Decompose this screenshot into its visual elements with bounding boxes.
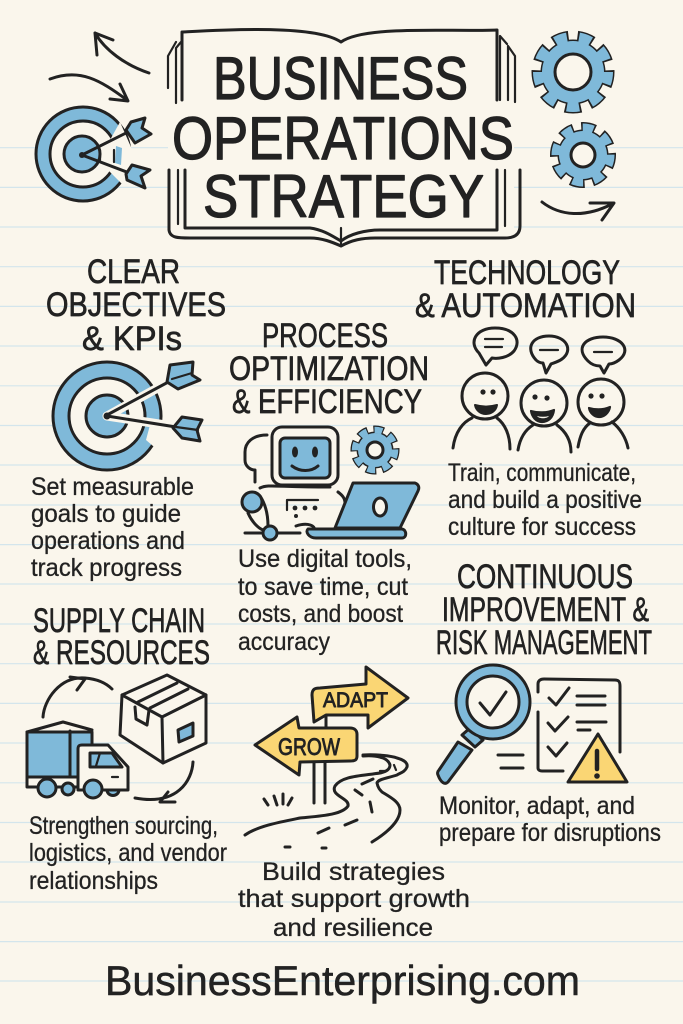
text: continuous improvement: prepare for disruptions: [439, 819, 661, 847]
text: supply chain: Strengthen sourcing,: [29, 812, 218, 840]
text: clear objectives: track progress: [31, 554, 182, 582]
icon: cardboard box: [120, 675, 206, 763]
text: strategy: that support growth: [238, 885, 470, 913]
icon: truck: [27, 722, 128, 798]
section: supply chain: [27, 602, 227, 895]
text: supply chain: [29, 812, 227, 895]
icon: large gear: [538, 37, 608, 107]
title: OPERATIONS: [172, 105, 514, 172]
section: technology and automation: [415, 254, 642, 541]
text: strategy: Build strategies: [262, 858, 445, 886]
text: process optimization: accuracy: [238, 628, 330, 656]
icon: curved arrow right: [542, 202, 614, 220]
heading: clear objectives: [46, 253, 226, 358]
text: supply chain: relationships: [29, 867, 158, 895]
text: technology: Train, communicate,: [448, 459, 636, 487]
heading: clear objectives: CLEAR: [87, 253, 180, 291]
heading: clear objectives: & KPIs: [82, 320, 182, 358]
section: strategy signpost: [238, 667, 470, 942]
heading: supply chain: SUPPLY CHAIN: [33, 602, 205, 640]
icon: checklist: [498, 679, 620, 771]
title: STRATEGY: [203, 163, 484, 230]
text: clear objectives: [31, 473, 194, 582]
text: process optimization: Use digital tools,: [238, 545, 412, 573]
text: clear objectives: goals to guide: [31, 500, 181, 528]
heading: technology: TECHNOLOGY: [434, 254, 620, 292]
section: process optimization: [229, 317, 429, 656]
section: clear objectives: [31, 253, 226, 582]
heading: continuous improvement: [436, 558, 652, 662]
footer website: BusinessEnterprising.com: [105, 957, 580, 1004]
icon: signpost and road: ADAPT: [323, 689, 388, 712]
heading: supply chain: [33, 602, 210, 672]
text: clear objectives: operations and: [31, 527, 185, 555]
heading: process optimization: PROCESS: [262, 317, 388, 355]
heading: clear objectives: OBJECTIVES: [46, 286, 226, 324]
icon: magnifying glass: [438, 665, 530, 783]
text: technology: and build a positive: [448, 486, 642, 514]
text: technology: [448, 459, 642, 541]
header: open book frame: [168, 29, 520, 246]
title: [172, 45, 514, 230]
icon: target with arrows: [53, 362, 202, 470]
heading: process optimization: [229, 317, 429, 421]
heading: continuous improvement: CONTINUOUS: [457, 558, 633, 596]
text: clear objectives: Set measurable: [31, 473, 194, 501]
text: strategy: and resilience: [273, 914, 433, 942]
text: strategy: [238, 858, 470, 942]
text: process optimization: to save time, cut: [238, 573, 408, 601]
icon: header target with arrows: [36, 107, 151, 201]
title: BUSINESS: [213, 45, 468, 112]
section: continuous improvement: [436, 558, 661, 847]
text: continuous improvement: [439, 792, 661, 847]
text: technology: culture for success: [448, 513, 636, 541]
text: supply chain: logistics, and vendor: [29, 839, 227, 867]
icon: signpost and road: GROW: [278, 734, 340, 761]
heading: technology: [415, 254, 636, 325]
icon: signpost and road: [245, 667, 408, 848]
icon: small gear: [556, 128, 610, 182]
heading: process optimization: & EFFICIENCY: [232, 383, 422, 421]
heading: process optimization: OPTIMIZATION: [229, 350, 429, 388]
icon: robot with laptop and gear: [242, 427, 419, 540]
heading: supply chain: & RESOURCES: [33, 634, 210, 672]
text: process optimization: costs, and boost: [238, 600, 403, 628]
heading: technology: & AUTOMATION: [415, 287, 636, 325]
icon: curved arrows top left: [50, 33, 149, 101]
icon: warning triangle: [568, 734, 627, 782]
icon: cycle arrows: [43, 677, 193, 802]
text: continuous improvement: Monitor, adapt, and: [439, 792, 635, 820]
text: process optimization: [238, 545, 412, 656]
icon: three people with speech bubbles: [453, 328, 628, 452]
